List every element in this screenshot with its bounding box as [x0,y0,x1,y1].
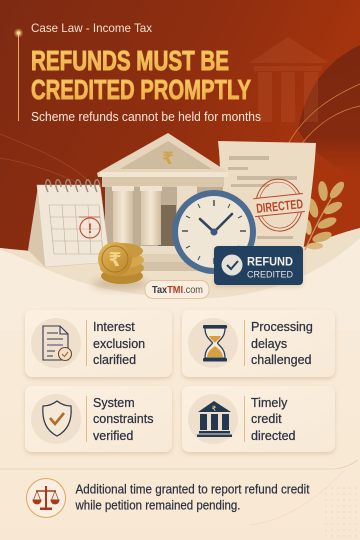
card text: constraints [93,412,153,426]
illustration: clock [172,190,256,274]
refund credited badge: CREDITED [247,270,293,280]
footer text: Additional time granted to report refund credit [76,482,310,496]
card: timely credit directed [182,386,335,452]
card text: Interest [93,320,135,334]
illustration: plant [303,179,347,250]
icon: hourglass [203,325,227,362]
footer icon: scales of justice [26,478,66,518]
card: system constraints verified [25,386,172,452]
card text: clarified [93,353,136,367]
illustration: rupee coin stack [92,242,148,289]
card text: challenged [251,353,312,367]
cream curved base [0,228,360,330]
illustration: calendar [28,180,110,267]
card text: exclusion [93,337,145,351]
card text: credit [251,412,282,426]
title [31,45,251,105]
illustration: document with directed stamp [216,141,316,252]
footer text [75,482,310,512]
icon: document check [43,326,72,360]
card text: Timely [251,396,288,410]
taxtmi logo pill [145,280,209,298]
icon: bank: ₹ [212,405,217,413]
eyebrow label: Case Law - Income Tax [31,21,152,35]
illustration: calendar: ! [88,220,92,236]
ghost bank watermark [249,37,329,122]
header accent line [14,28,24,121]
card text [93,396,153,443]
illustration: rupee coin stack: ₹ [108,249,122,271]
card text: delays [251,337,287,351]
card text: directed [251,429,296,443]
title: REFUNDS MUST BE [31,45,229,76]
card text: verified [93,429,133,443]
refund credited badge: REFUND [247,256,293,268]
footer band [0,460,360,540]
rupee symbol: ₹ [162,149,174,169]
icon: shield check [43,401,71,436]
stamp: DIRECTED [255,196,304,216]
refund credited badge [214,246,303,285]
taxtmi logo pill: TaxTMI.com [152,284,203,296]
card text [93,320,145,367]
card text: Processing [251,320,313,334]
card text [251,396,296,443]
card: processing delays challenged [182,310,335,377]
icon: bank [197,401,232,437]
card text [251,320,313,367]
card text: System [93,396,135,410]
card: interest exclusion clarified [25,310,172,377]
footer text: while petition remained pending. [75,498,240,512]
header red background with curved lower edge [0,0,360,252]
illustration: bank building [97,133,228,271]
subtitle: Scheme refunds cannot be held for months [31,109,261,124]
title: CREDITED PROMPTLY [31,74,251,105]
